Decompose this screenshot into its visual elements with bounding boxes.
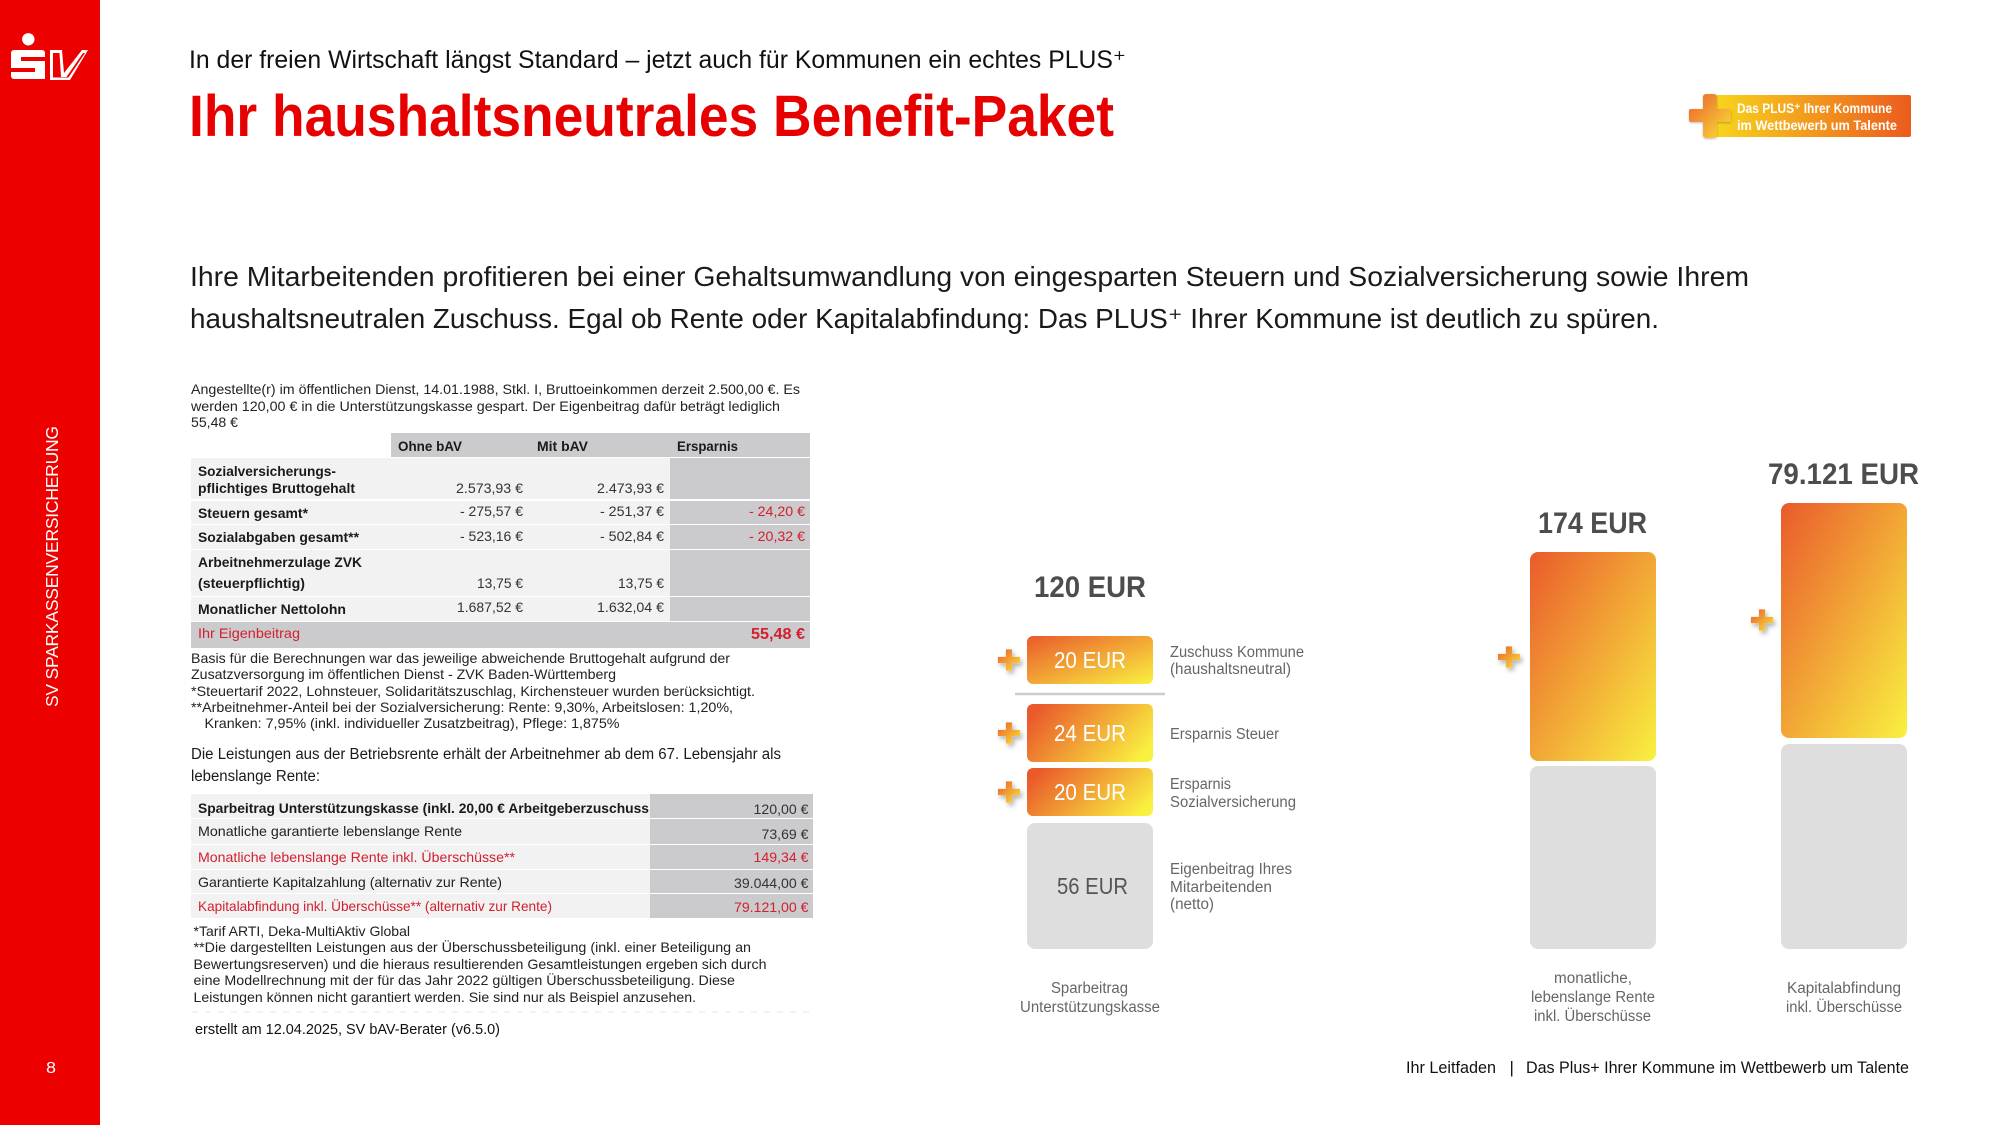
row: Arbeitnehmerzulage: 13,75 € bbox=[477, 575, 523, 591]
row: Steuern bbox=[198, 503, 805, 521]
label: Zuschuss Kommune: Zuschuss Kommune bbox=[1170, 644, 1304, 661]
comparison table bbox=[191, 433, 810, 648]
caption: Sparbeitrag: Sparbeitrag bbox=[1051, 980, 1128, 997]
bar: grey part bbox=[1781, 744, 1907, 949]
caption: Sparbeitrag: Unterstützungskasse bbox=[1020, 999, 1160, 1016]
value: 174 EUR: 174 EUR bbox=[1538, 507, 1647, 540]
row: Kapitalabfindung: 79.121,00 € bbox=[734, 899, 809, 915]
row: garantierte Rente: Monatliche garantierte lebenslange Rente bbox=[198, 823, 462, 839]
calculation footnotes bbox=[191, 650, 755, 731]
caption: Kapitalabfindung: inkl. Überschüsse bbox=[1786, 998, 1902, 1016]
table header bbox=[398, 439, 738, 454]
row: Kapitalzahlung: Garantierte Kapitalzahlung (alternativ zur Rente) bbox=[198, 874, 502, 890]
row: Eigenbeitrag: Ihr Eigenbeitrag bbox=[198, 625, 300, 641]
label: Zuschuss Kommune: (haushaltsneutral) bbox=[1170, 661, 1291, 678]
sidebar label: SV SPARKASSENVERSICHERUNG bbox=[42, 426, 62, 707]
row: Bruttogehalt bbox=[198, 464, 664, 496]
icon: plus bbox=[1752, 610, 1772, 630]
intro text: Ihre Mitarbeitenden profitieren bei einer Gehaltsumwandlung von eingesparten Steuern und Sozialversicherung sowie Ihrem bbox=[190, 261, 1749, 292]
benefits footnotes: Leistungen können nicht garantiert werden. Sie sind nur als Beispiel anzusehen. bbox=[194, 989, 696, 1005]
badge text: Das PLUS⁺ Ihrer Kommune bbox=[1737, 101, 1892, 116]
icon: badge plus bbox=[1689, 94, 1731, 138]
footer: | bbox=[1510, 1058, 1514, 1077]
segment: Zuschuss Kommune bbox=[1027, 636, 1153, 684]
row: Kapitalabfindung bbox=[198, 897, 809, 915]
icon: plus bbox=[1498, 647, 1520, 667]
bar: grey part bbox=[1530, 766, 1656, 949]
calculation footnotes: Kranken: 7,95% (inkl. individueller Zusatzbeitrag), Pflege: 1,875% bbox=[204, 715, 620, 731]
benefits footnotes bbox=[194, 923, 766, 1005]
row: Steuern: Steuern gesamt* bbox=[198, 506, 309, 521]
table header: Ohne bAV bbox=[398, 439, 462, 454]
benefits intro: Die Leistungen aus der Betriebsrente erhält der Arbeitnehmer ab dem 67. Lebensjahr als bbox=[191, 746, 781, 763]
badge text bbox=[1737, 101, 1897, 133]
table header: Mit bAV bbox=[537, 439, 588, 454]
row: Sozialabgaben: - 20,32 € bbox=[749, 528, 805, 544]
row: Sozialabgaben bbox=[198, 528, 805, 545]
caption: Rente: lebenslange Rente bbox=[1531, 989, 1655, 1006]
row: garantierte Rente bbox=[198, 823, 809, 842]
segment: Ersparnis Sozialversicherung bbox=[1027, 768, 1153, 816]
bar: orange part bbox=[1781, 503, 1907, 738]
row: Sozialabgaben: - 502,84 € bbox=[600, 528, 664, 544]
row: Steuern: - 24,20 € bbox=[749, 503, 805, 519]
row: Rente inkl. Überschüsse bbox=[198, 848, 809, 865]
label: Zuschuss Kommune bbox=[1170, 644, 1304, 678]
icon: SV logo bbox=[11, 33, 88, 80]
creation note: erstellt am 12.04.2025, SV bAV-Berater (v6.5.0) bbox=[195, 1022, 500, 1038]
example description: Angestellte(r) im öffentlichen Dienst, 14.01.1988, Stkl. I, Bruttoeinkommen derzeit 2.500,00 €. Es bbox=[191, 381, 800, 397]
example description: werden 120,00 € in die Unterstützungskasse gespart. Der Eigenbeitrag dafür beträgt lediglich bbox=[190, 398, 780, 414]
caption: Kapitalabfindung: Kapitalabfindung bbox=[1787, 980, 1901, 997]
label: Eigenbeitrag: Mitarbeitenden bbox=[1170, 879, 1272, 896]
label: Ersparnis Steuer: Ersparnis Steuer bbox=[1170, 726, 1279, 743]
row: Kapitalzahlung: 39.044,00 € bbox=[734, 875, 809, 891]
title: Ihr haushaltsneutrales Benefit-Paket bbox=[189, 84, 1114, 149]
benefits table bbox=[191, 794, 813, 918]
row: Kapitalzahlung bbox=[198, 874, 809, 891]
benefits intro bbox=[191, 746, 781, 785]
chart: Sparbeitrag stack bbox=[998, 571, 1304, 1016]
footer: Das Plus+ Ihrer Kommune im Wettbewerb um Talente bbox=[1526, 1058, 1909, 1077]
row: garantierte Rente: 73,69 € bbox=[762, 826, 809, 842]
row: Sparbeitrag: 120,00 € bbox=[754, 801, 809, 817]
row: Rente inkl. Überschüsse: 149,34 € bbox=[754, 849, 809, 865]
icon: plus 3 bbox=[998, 782, 1020, 802]
intro text: haushaltsneutralen Zuschuss. Egal ob Rente oder Kapitalabfindung: Das PLUS⁺ Ihrer Kommune ist deutlich zu spüren. bbox=[190, 303, 1659, 334]
row: Nettolohn: 1.632,04 € bbox=[597, 599, 664, 615]
row: Arbeitnehmerzulage: Arbeitnehmerzulage ZVK bbox=[198, 555, 362, 570]
example description: 55,48 € bbox=[191, 414, 238, 430]
label: Eigenbeitrag bbox=[1170, 861, 1292, 913]
caption: Sparbeitrag bbox=[1020, 980, 1160, 1016]
row: Steuern: - 275,57 € bbox=[460, 503, 523, 519]
chart: lebenslange Rente bar bbox=[1498, 507, 1656, 1025]
row: Bruttogehalt: pflichtiges Bruttogehalt bbox=[198, 481, 356, 496]
intro text bbox=[190, 261, 1749, 334]
page number: 8 bbox=[46, 1060, 56, 1077]
table header: Ersparnis bbox=[677, 439, 738, 454]
benefits footnotes: Bewertungsreserven) und die hieraus resultierenden Gesamtleistungen ergeben sich durch bbox=[194, 956, 766, 972]
example description bbox=[190, 381, 800, 430]
label: Ersparnis Sozialversicherung: Sozialversicherung bbox=[1170, 794, 1296, 811]
caption: Rente bbox=[1531, 970, 1655, 1025]
chart: Kapitalabfindung bar bbox=[1752, 458, 1919, 1016]
value: 120 EUR: 120 EUR bbox=[1034, 571, 1146, 604]
benefits footnotes: eine Modellrechnung mit der für das Jahr 2022 gültigen Überschussbeteiligung. Diese bbox=[194, 971, 735, 988]
row: Bruttogehalt: 2.473,93 € bbox=[597, 480, 664, 496]
badge: Das PLUS bbox=[1689, 94, 1911, 138]
label: Ersparnis Sozialversicherung: Ersparnis bbox=[1170, 776, 1231, 793]
segment: Eigenbeitrag: 56 EUR bbox=[1057, 873, 1128, 899]
calculation footnotes: Basis für die Berechnungen war das jeweilige abweichende Bruttogehalt aufgrund der bbox=[191, 650, 730, 666]
row: Bruttogehalt: 2.573,93 € bbox=[456, 480, 523, 496]
icon: plus 2 bbox=[998, 723, 1020, 743]
calculation footnotes: *Steuertarif 2022, Lohnsteuer, Solidaritätszuschlag, Kirchensteuer wurden berücksichtigt. bbox=[191, 683, 755, 699]
kicker heading: In der freien Wirtschaft längst Standard – jetzt auch für Kommunen ein echtes PLUS⁺ bbox=[189, 46, 1126, 74]
badge text: im Wettbewerb um Talente bbox=[1737, 118, 1897, 133]
row: Sozialabgaben: Sozialabgaben gesamt** bbox=[198, 530, 360, 545]
calculation footnotes: Zusatzversorgung im öffentlichen Dienst - ZVK Baden-Württemberg bbox=[191, 666, 616, 682]
caption: Kapitalabfindung bbox=[1786, 980, 1902, 1016]
icon: plus 1 bbox=[998, 650, 1020, 670]
row: Nettolohn bbox=[198, 599, 664, 617]
row: Arbeitnehmerzulage: (steuerpflichtig) bbox=[198, 576, 305, 591]
segment: Eigenbeitrag bbox=[1027, 823, 1153, 949]
row: Nettolohn: 1.687,52 € bbox=[457, 599, 523, 615]
benefits footnotes: **Die dargestellten Leistungen aus der Überschussbeteiligung (inkl. einer Beteiligung an bbox=[194, 938, 751, 955]
segment: Ersparnis Steuer: 24 EUR bbox=[1054, 720, 1126, 746]
segment: Zuschuss Kommune: 20 EUR bbox=[1054, 647, 1126, 673]
value: 79.121 EUR: 79.121 EUR bbox=[1768, 458, 1919, 491]
caption: Rente: inkl. Überschüsse bbox=[1534, 1007, 1651, 1025]
row: Eigenbeitrag: 55,48 € bbox=[751, 626, 805, 643]
row: Sozialabgaben: - 523,16 € bbox=[460, 528, 523, 544]
label: Eigenbeitrag: (netto) bbox=[1170, 896, 1214, 913]
calculation footnotes: **Arbeitnehmer-Anteil bei der Sozialversicherung: Rente: 9,30%, Arbeitslosen: 1,20%, bbox=[191, 699, 733, 715]
row: Eigenbeitrag bbox=[198, 625, 805, 643]
benefits intro: lebenslange Rente: bbox=[191, 768, 320, 785]
segment: Ersparnis Sozialversicherung: 20 EUR bbox=[1054, 779, 1126, 805]
row: Kapitalabfindung: Kapitalabfindung inkl. Überschüsse** (alternativ zur Rente) bbox=[198, 897, 552, 914]
label: Ersparnis Sozialversicherung bbox=[1170, 776, 1296, 811]
row: Arbeitnehmerzulage: 13,75 € bbox=[618, 575, 664, 591]
row: Rente inkl. Überschüsse: Monatliche lebenslange Rente inkl. Überschüsse** bbox=[198, 848, 516, 865]
label: Eigenbeitrag: Eigenbeitrag Ihres bbox=[1170, 861, 1292, 878]
benefits footnotes: *Tarif ARTI, Deka-MultiAktiv Global bbox=[194, 923, 410, 939]
row: Sparbeitrag bbox=[198, 801, 809, 817]
caption: Rente: monatliche, bbox=[1554, 970, 1632, 987]
bar: orange part bbox=[1530, 552, 1656, 761]
footer: Ihr Leitfaden bbox=[1406, 1058, 1496, 1077]
segment: Ersparnis Steuer bbox=[1027, 704, 1153, 762]
sidebar bbox=[0, 0, 100, 1125]
row: Sparbeitrag: Sparbeitrag Unterstützungskasse (inkl. 20,00 € Arbeitgeberzuschuss bbox=[198, 801, 649, 816]
row: Nettolohn: Monatlicher Nettolohn bbox=[198, 602, 346, 617]
row: Steuern: - 251,37 € bbox=[600, 503, 664, 519]
row: Arbeitnehmerzulage bbox=[198, 555, 664, 591]
row: Bruttogehalt: Sozialversicherungs- bbox=[198, 464, 336, 479]
